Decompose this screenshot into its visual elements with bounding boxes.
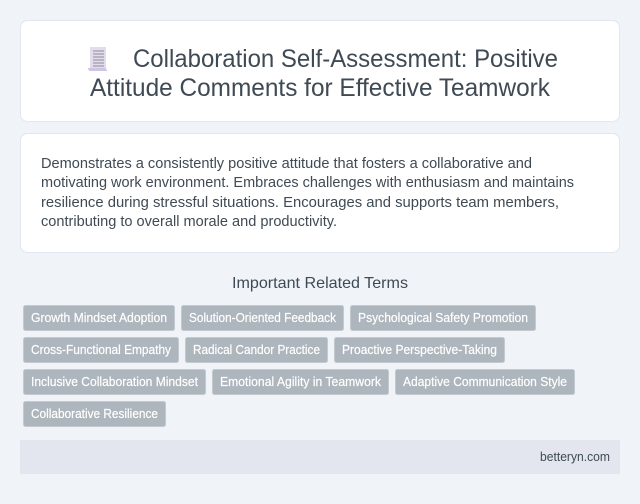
tag: Solution-Oriented Feedback bbox=[189, 311, 337, 325]
header panel bbox=[20, 20, 620, 122]
tag bbox=[24, 306, 174, 330]
footer bbox=[20, 440, 620, 474]
tag bbox=[182, 306, 344, 330]
footer: betteryn.com bbox=[540, 450, 610, 464]
tag bbox=[350, 306, 536, 330]
tags bbox=[24, 306, 574, 426]
description panel: Demonstrates a consistently positive attitude that fosters a collaborative and bbox=[41, 156, 532, 172]
tag: Adaptive Communication Style bbox=[403, 375, 567, 389]
icon: document scroll bbox=[88, 47, 107, 71]
tag: Radical Candor Practice bbox=[193, 343, 320, 357]
description panel: resilience during stressful situations. Encourages and supports team members, bbox=[41, 195, 559, 211]
description panel bbox=[20, 134, 620, 252]
title: Collaboration Self-Assessment: Positive bbox=[133, 45, 558, 73]
tag: Collaborative Resilience bbox=[31, 407, 158, 421]
tag bbox=[24, 370, 206, 394]
tag: Cross-Functional Empathy bbox=[31, 343, 172, 357]
title: Attitude Comments for Effective Teamwork bbox=[90, 74, 550, 102]
tag: Emotional Agility in Teamwork bbox=[220, 375, 382, 389]
section heading: Important Related Terms bbox=[232, 275, 408, 292]
tag bbox=[24, 338, 178, 362]
tag: Proactive Perspective-Taking bbox=[342, 343, 497, 357]
tag: Inclusive Collaboration Mindset bbox=[31, 375, 198, 389]
tag bbox=[396, 370, 574, 394]
tag bbox=[212, 370, 388, 394]
tag bbox=[24, 402, 166, 426]
tag bbox=[334, 338, 504, 362]
tag: Psychological Safety Promotion bbox=[358, 311, 528, 325]
description panel: contributing to overall morale and productivity. bbox=[41, 214, 337, 230]
tag bbox=[186, 338, 328, 362]
description panel: motivating work environment. Embraces challenges with enthusiasm and maintains bbox=[41, 175, 574, 191]
tag: Growth Mindset Adoption bbox=[31, 311, 167, 325]
title bbox=[90, 45, 558, 102]
